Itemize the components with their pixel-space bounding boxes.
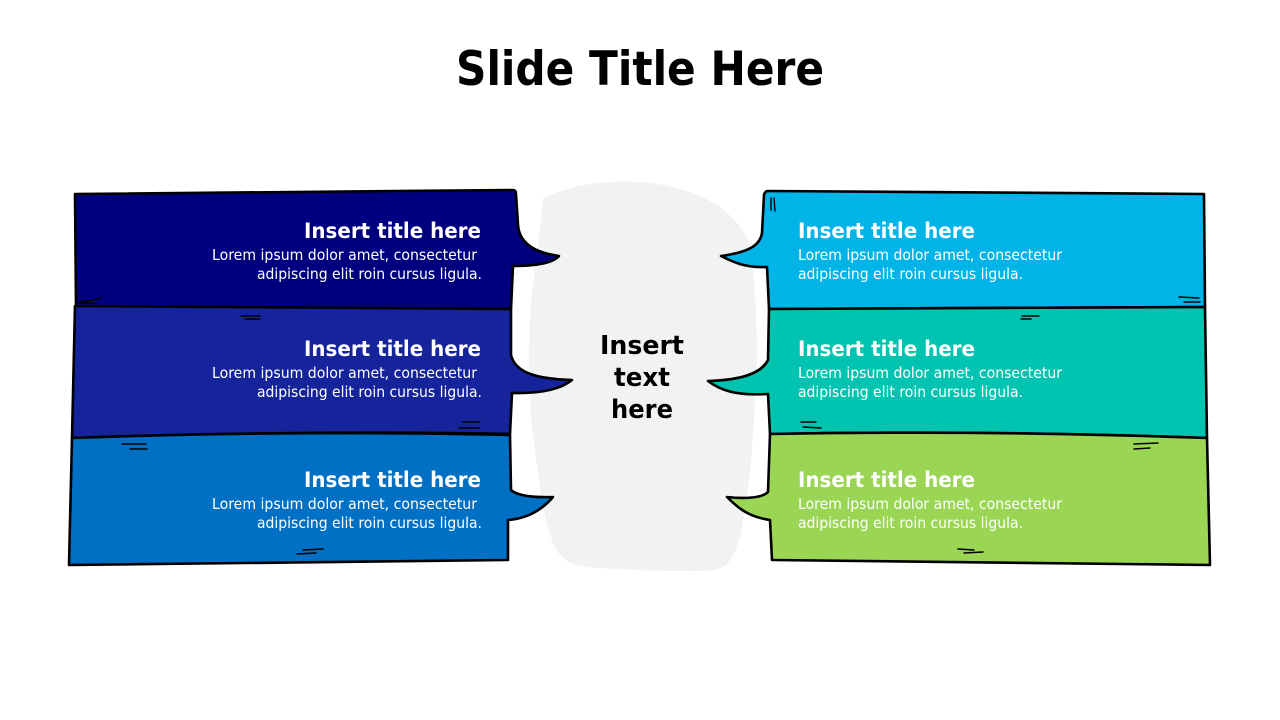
- body text: Lorem ipsum dolor amet, consectetur: [798, 246, 1063, 264]
- title text: Insert title here: [798, 219, 975, 243]
- body text: Lorem ipsum dolor amet, consectetur: [212, 495, 478, 513]
- body text: [212, 246, 482, 283]
- title text: Insert title here: [304, 337, 481, 361]
- body text: [798, 495, 1063, 532]
- scribble marks: [459, 422, 480, 428]
- body text: [212, 495, 482, 532]
- title text: Insert title here: [304, 219, 481, 243]
- body text: Lorem ipsum dolor amet, consectetur: [212, 246, 478, 264]
- scribble marks: [771, 198, 775, 211]
- panel: left 2: [72, 306, 572, 438]
- body text: adipiscing elit roin cursus ligula.: [798, 383, 1023, 401]
- body text: adipiscing elit roin cursus ligula.: [798, 514, 1023, 532]
- body text: adipiscing elit roin cursus ligula.: [257, 265, 482, 283]
- panel: right 2: [708, 307, 1207, 438]
- central text: [600, 331, 684, 425]
- scribble marks: [1134, 443, 1158, 449]
- central text: Insert: [600, 331, 684, 361]
- body text: adipiscing elit roin cursus ligula.: [257, 383, 482, 401]
- central grey speech shape: [529, 182, 757, 571]
- panel: right 1: [721, 191, 1205, 309]
- body text: [798, 246, 1063, 283]
- panel: left 3: [69, 433, 553, 565]
- body text: [798, 364, 1063, 401]
- body text: Lorem ipsum dolor amet, consectetur: [212, 364, 478, 382]
- body text: Lorem ipsum dolor amet, consectetur: [798, 495, 1063, 513]
- panel: left 1: [75, 190, 559, 309]
- scribble marks: [122, 444, 147, 449]
- scribble marks: [297, 549, 323, 554]
- title text: Insert title here: [798, 337, 975, 361]
- body text: adipiscing elit roin cursus ligula.: [257, 514, 482, 532]
- scribble marks: [241, 316, 260, 319]
- body text: [212, 364, 482, 401]
- body text: Lorem ipsum dolor amet, consectetur: [798, 364, 1063, 382]
- title: Slide Title Here: [456, 42, 824, 97]
- scribble marks: [79, 298, 101, 303]
- body text: adipiscing elit roin cursus ligula.: [798, 265, 1023, 283]
- scribble marks: [958, 549, 983, 553]
- title text: Insert title here: [304, 468, 481, 492]
- title text: Insert title here: [798, 468, 975, 492]
- scribble marks: [801, 422, 821, 428]
- scribble marks: [1021, 316, 1039, 319]
- central text: here: [611, 395, 673, 425]
- panel: right 3: [727, 433, 1210, 565]
- central text: text: [614, 363, 670, 393]
- scribble marks: [1179, 297, 1200, 302]
